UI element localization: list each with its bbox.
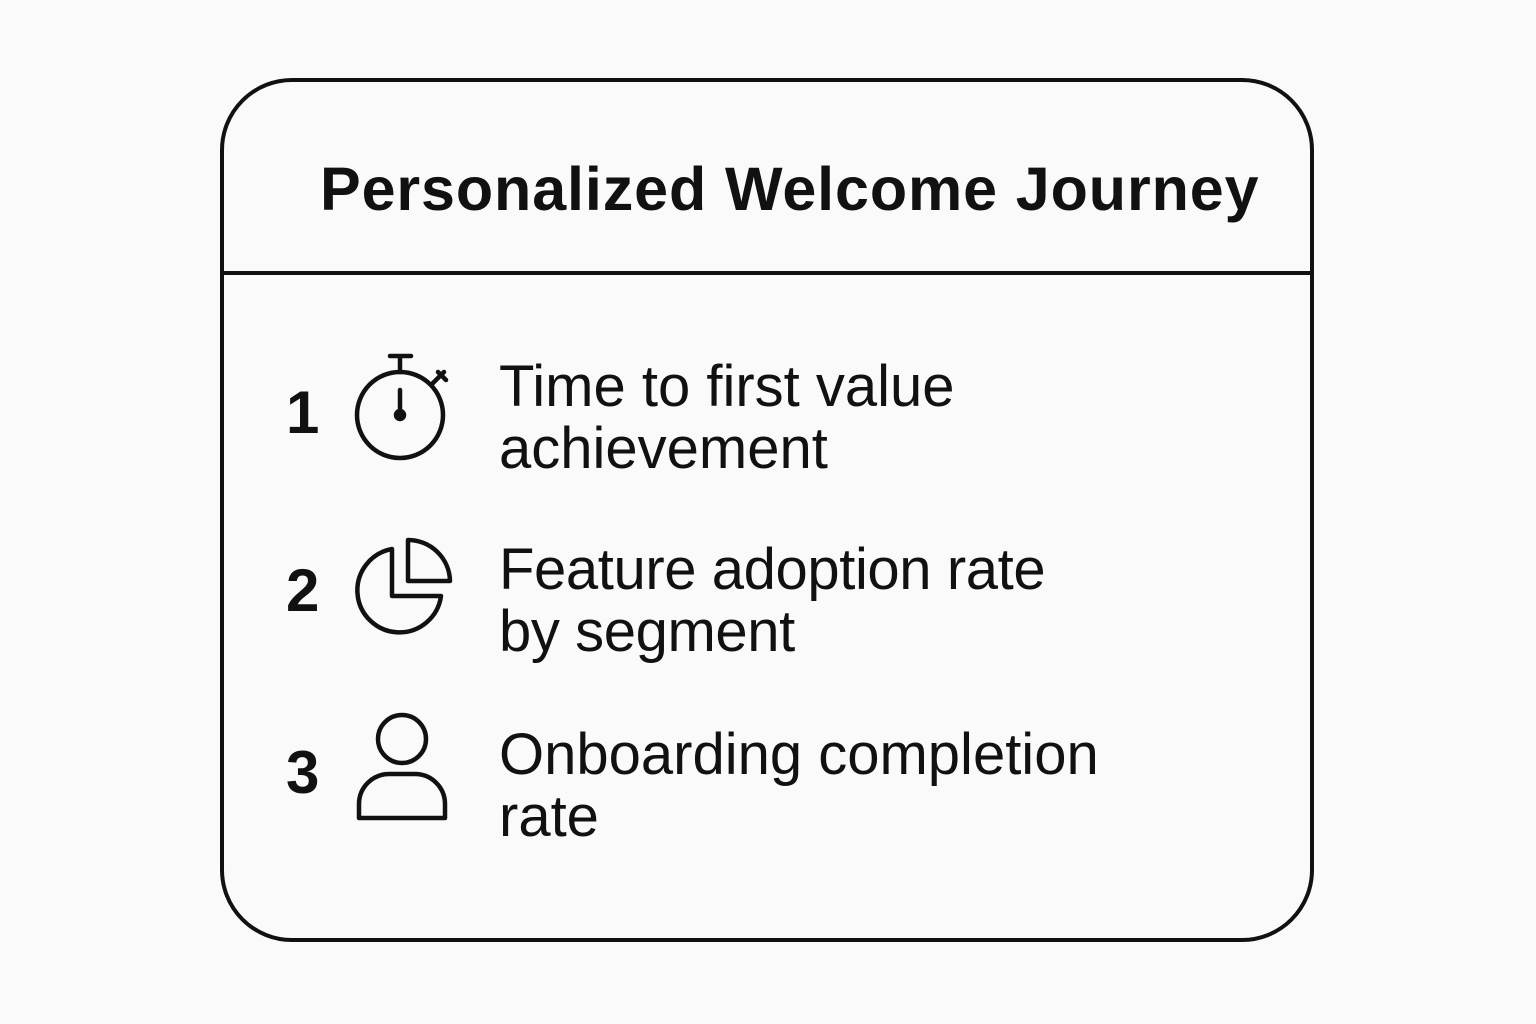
panel: card xyxy=(220,78,1314,942)
text 3 xyxy=(499,722,1099,849)
icon: stopwatch xyxy=(357,356,446,458)
number 2: 2 xyxy=(286,557,319,624)
icon: person xyxy=(359,715,445,818)
text 1: achievement xyxy=(499,416,828,481)
text 2: Feature adoption rate xyxy=(499,537,1045,602)
number 1: 1 xyxy=(286,379,319,446)
text 3: rate xyxy=(499,784,599,849)
text 2: by segment xyxy=(499,599,795,664)
title: Personalized Welcome Journey xyxy=(320,155,1259,223)
text 2 xyxy=(499,537,1045,664)
icon: pie chart xyxy=(357,540,450,632)
text 3: Onboarding completion xyxy=(499,722,1099,787)
text 1: Time to first value xyxy=(499,354,955,419)
text 1 xyxy=(499,354,955,481)
number 3: 3 xyxy=(286,739,319,806)
